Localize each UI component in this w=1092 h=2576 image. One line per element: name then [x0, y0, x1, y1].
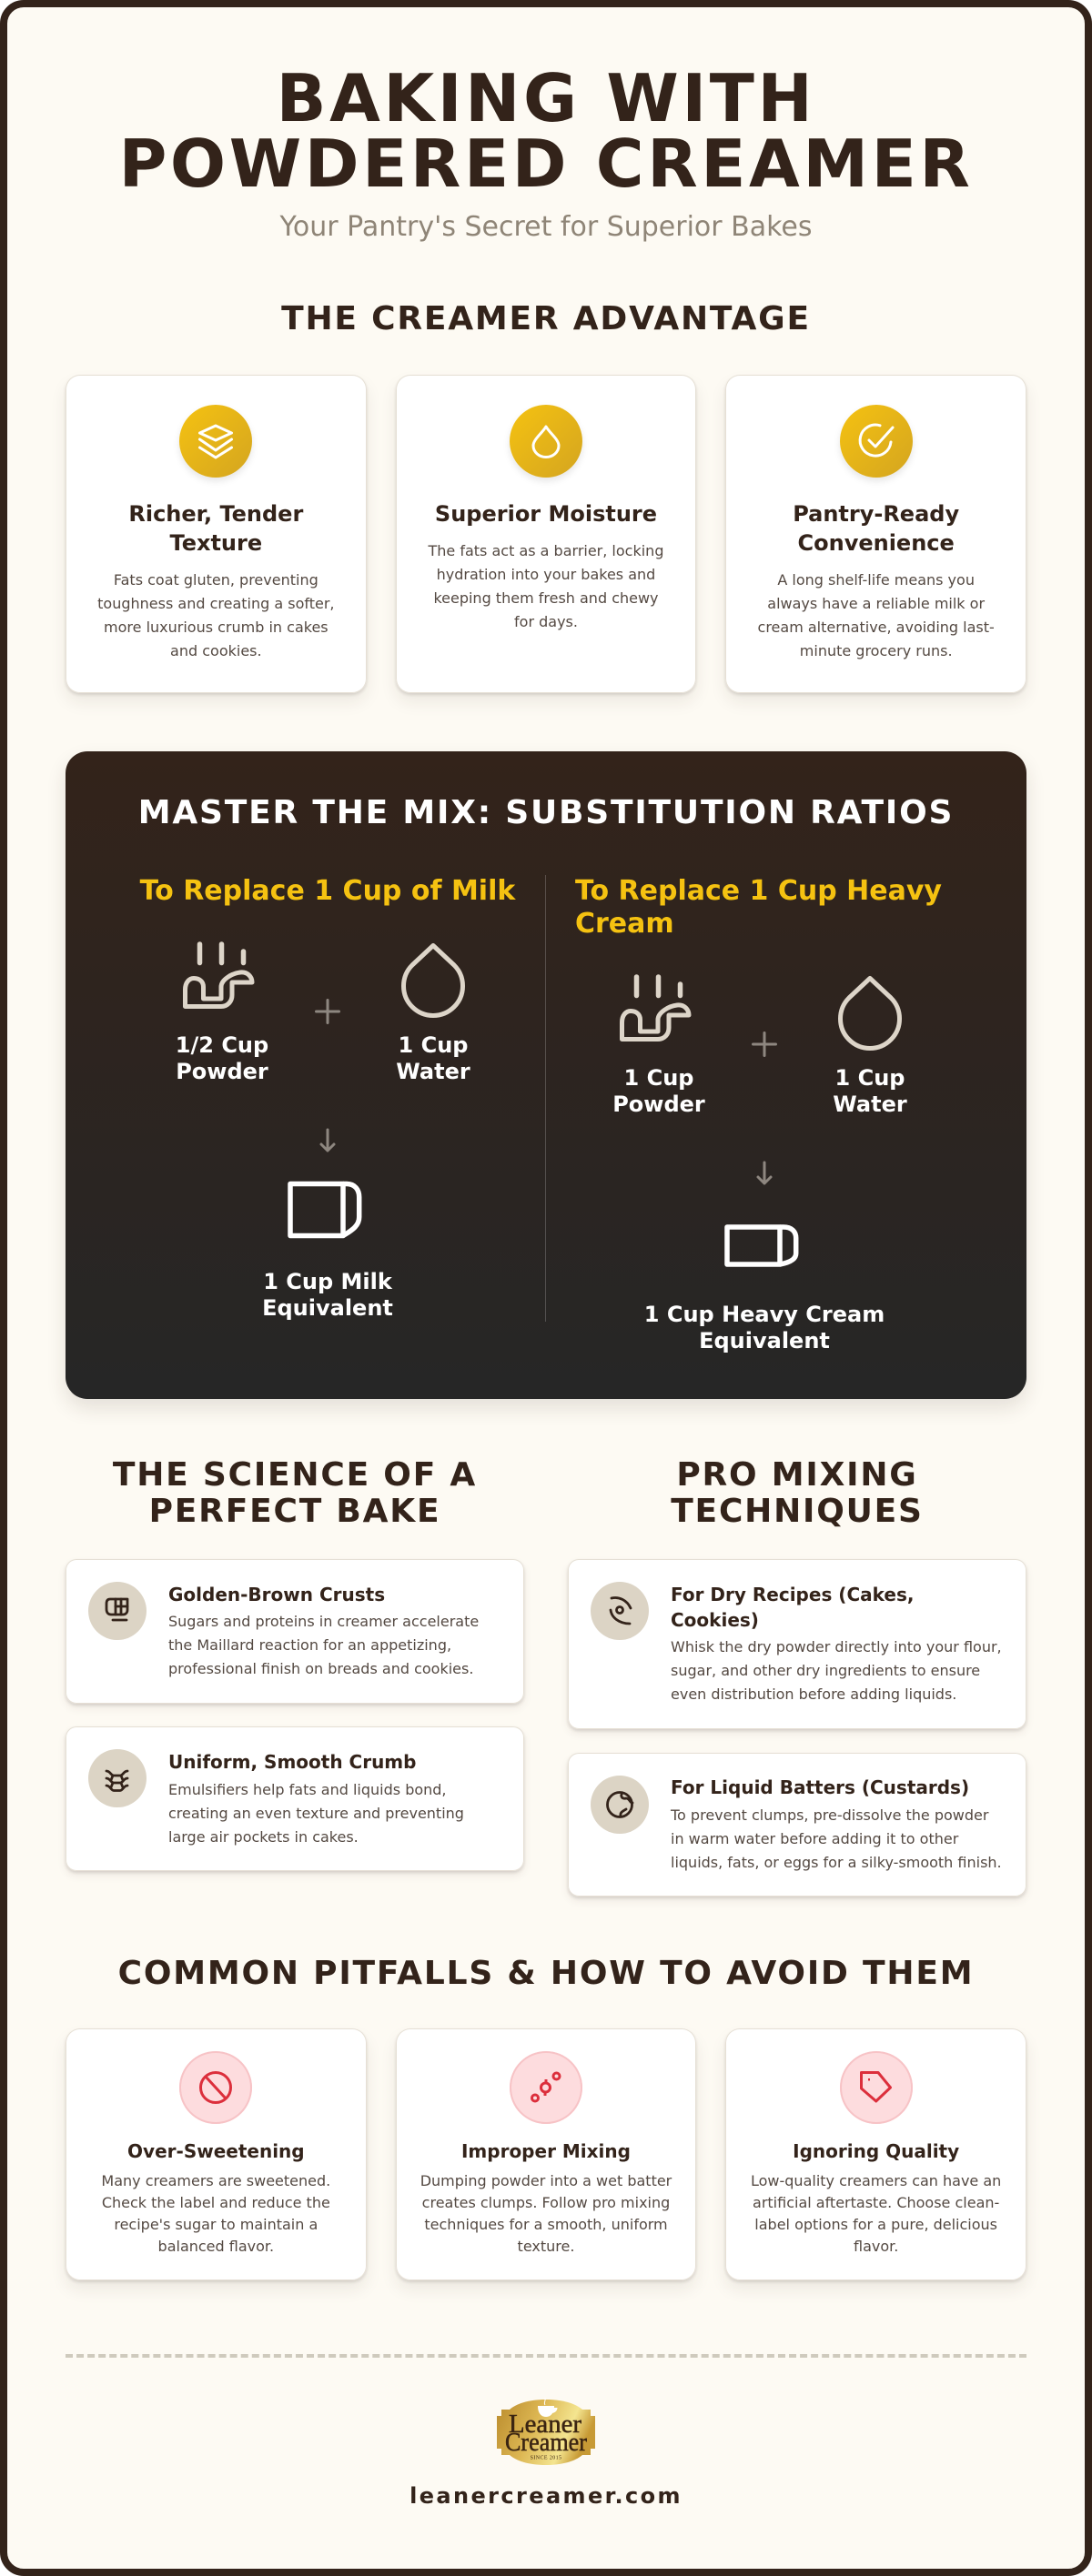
item text: liquids, fats, or eggs for a silky-smooth finish. [671, 1854, 1002, 1870]
column heading: To Replace 1 Cup of Milk [140, 875, 515, 907]
title: POWDERED CREAMER [119, 126, 973, 202]
item title [671, 1584, 914, 1631]
card title: Over-Sweetening [127, 2140, 305, 2162]
item text: creating an even texture and preventing [168, 1805, 464, 1822]
item text: Sugars and proteins in creamer accelerate [168, 1613, 479, 1630]
label: water: 1 Cup [835, 1065, 905, 1091]
card title [128, 501, 304, 556]
card text [420, 2172, 672, 2255]
card text: texture. [518, 2238, 574, 2255]
label: powder: 1 Cup [624, 1065, 693, 1091]
heading: the science of a perfect bake: THE SCIENCE OF A [113, 1455, 477, 1494]
item text [670, 1806, 1002, 1870]
icon: tag [840, 2051, 913, 2124]
card text: keeping them fresh and chewy [433, 589, 659, 607]
icon: check circle [840, 405, 913, 478]
label: result: 1 Cup Heavy Cream [644, 1302, 885, 1327]
item text [168, 1613, 479, 1677]
heading: common pitfalls: COMMON PITFALLS & HOW TO AVOID THEM [118, 1955, 974, 1992]
icon: water drop [401, 942, 465, 1018]
heading: the science of a perfect bake [113, 1455, 477, 1530]
card text: A long shelf-life means you [777, 571, 975, 589]
card text: hydration into your bakes and [437, 566, 655, 583]
item text: sugar, and other dry ingredients to ensure [671, 1662, 980, 1679]
card title: Texture [170, 530, 262, 556]
item text: Whisk the dry powder directly into your flour, [671, 1638, 1002, 1655]
item title: Uniform, Smooth Crumb [168, 1751, 416, 1773]
card text [428, 542, 663, 630]
icon: ban [179, 2051, 252, 2124]
item text: even distribution before adding liquids. [671, 1685, 956, 1703]
card text: toughness and creating a softer, [97, 595, 335, 612]
icon: whisk [591, 1582, 649, 1640]
label: result: 1 Cup Milk [263, 1269, 392, 1294]
card title: Pantry-Ready [793, 501, 959, 527]
title: BAKING WITH [277, 60, 815, 136]
card text: Dumping powder into a wet batter [420, 2172, 672, 2189]
icon: cup of cream [724, 1224, 799, 1267]
heading: pro mixing techniques: TECHNIQUES [671, 1492, 924, 1530]
plus sign [315, 999, 340, 1024]
logo: leaner creamer: Creamer [505, 2428, 587, 2457]
card text: The fats act as a barrier, locking [428, 542, 663, 559]
item text: professional finish on breads and cookies. [168, 1660, 473, 1677]
heavy cream ratio column [575, 875, 942, 1353]
heading: pro mixing techniques [671, 1455, 924, 1530]
card text: minute grocery runs. [800, 642, 953, 659]
panel: superior moisture [396, 375, 696, 693]
item text [671, 1638, 1002, 1703]
card text: Check the label and reduce the [102, 2194, 330, 2211]
item text: the Maillard reaction for an appetizing, [168, 1636, 451, 1654]
label: water: Water [833, 1092, 907, 1117]
item title: Cookies) [671, 1609, 759, 1631]
card text: cream alternative, avoiding last- [758, 619, 995, 636]
card text: label options for a pure, delicious [754, 2216, 997, 2233]
label: result: Equivalent [699, 1328, 830, 1353]
card title: Improper Mixing [461, 2140, 631, 2162]
title [119, 60, 973, 202]
heading: the creamer advantage: THE CREAMER ADVANTAGE [281, 300, 811, 337]
card text: balanced flavor. [158, 2238, 274, 2255]
column heading: Cream [575, 908, 674, 940]
panel: ignoring quality [725, 2028, 1026, 2280]
card title: Richer, Tender [128, 501, 303, 527]
panel: uniform smooth crumb [66, 1726, 524, 1871]
footer url: leanercreamer.com [410, 2483, 682, 2509]
card title [793, 501, 959, 556]
logo: leaner creamer: SINCE 2015 [531, 2456, 561, 2461]
logo: leaner creamer: Leaner [509, 2410, 581, 2439]
icon: powder [183, 941, 255, 1009]
label: powder: Powder [176, 1059, 268, 1084]
icon: bread [88, 1582, 147, 1640]
card text [758, 571, 995, 659]
heading: the science of a perfect bake: PERFECT BAKE [149, 1492, 440, 1530]
card text: creates clumps. Follow pro mixing [422, 2194, 670, 2211]
label: water: 1 Cup [399, 1032, 468, 1058]
icon: powder [620, 974, 692, 1041]
panel: pantry-ready convenience [725, 375, 1026, 693]
label: water: Water [396, 1059, 470, 1084]
card text [751, 2172, 1001, 2255]
label: water [396, 1032, 470, 1084]
card title: Convenience [797, 530, 955, 556]
item title: For Dry Recipes (Cakes, [671, 1584, 914, 1605]
item text [168, 1781, 464, 1846]
card text: and cookies. [170, 642, 262, 659]
label: result [262, 1269, 393, 1321]
label: powder [612, 1065, 705, 1117]
card text: flavor. [854, 2238, 898, 2255]
item text: large air pockets in cakes. [168, 1828, 359, 1846]
plus sign [752, 1031, 777, 1057]
card text [97, 571, 335, 659]
column heading: To Replace 1 Cup Heavy [575, 875, 942, 907]
panel: improper mixing [396, 2028, 696, 2280]
label: powder: Powder [612, 1092, 705, 1117]
card title: Ignoring Quality [793, 2140, 959, 2162]
icon: dissolving [591, 1776, 649, 1834]
card text: Low-quality creamers can have an [751, 2172, 1001, 2189]
icon: droplet [510, 405, 582, 478]
panel: for dry recipes [568, 1559, 1026, 1729]
panel heading: MASTER THE MIX: SUBSTITUTION RATIOS [138, 794, 954, 831]
subtitle: Your Pantry's Secret for Superior Bakes [280, 211, 812, 243]
label: powder [176, 1032, 268, 1084]
item text: Emulsifiers help fats and liquids bond, [168, 1781, 447, 1798]
icon: clumps [510, 2051, 582, 2124]
card text: recipe's sugar to maintain a [114, 2216, 318, 2233]
panel: master the mix [66, 751, 1026, 1399]
card text: Fats coat gluten, preventing [114, 571, 318, 589]
item text: in warm water before adding it to other [671, 1830, 958, 1846]
panel: golden-brown crusts [66, 1559, 524, 1704]
arrow down [757, 1161, 772, 1184]
item title: Golden-Brown Crusts [168, 1584, 385, 1605]
card text: for days. [514, 613, 578, 630]
item title: For Liquid Batters (Custards) [671, 1776, 969, 1797]
panel: richer tender texture [66, 375, 367, 693]
milk ratio column [140, 875, 516, 1321]
item text: To prevent clumps, pre-dissolve the powder [671, 1806, 988, 1823]
card text: Many creamers are sweetened. [101, 2172, 330, 2189]
card text: more luxurious crumb in cakes [104, 619, 329, 636]
card title: Superior Moisture [435, 501, 657, 527]
arrow down [320, 1128, 335, 1152]
column heading [575, 875, 942, 940]
label: powder: 1/2 Cup [176, 1032, 268, 1058]
icon: water drop [838, 975, 902, 1051]
logo: leaner creamer [497, 2398, 595, 2465]
icon: cup of milk [288, 1181, 362, 1239]
heading: pro mixing techniques: PRO MIXING [676, 1455, 918, 1494]
icon: crumb layers [88, 1749, 147, 1807]
card text [101, 2172, 330, 2255]
label: result [644, 1302, 885, 1353]
card text: artificial aftertaste. Choose clean- [753, 2194, 999, 2211]
card text: techniques for a smooth, uniform [424, 2216, 668, 2233]
label: water [833, 1065, 907, 1117]
panel: for liquid batters [568, 1752, 1026, 1897]
card text: always have a reliable milk or [767, 595, 985, 612]
icon: layers [179, 405, 252, 478]
label: result: Equivalent [262, 1295, 393, 1321]
panel: over-sweetening [66, 2028, 367, 2280]
column divider [545, 875, 546, 1322]
